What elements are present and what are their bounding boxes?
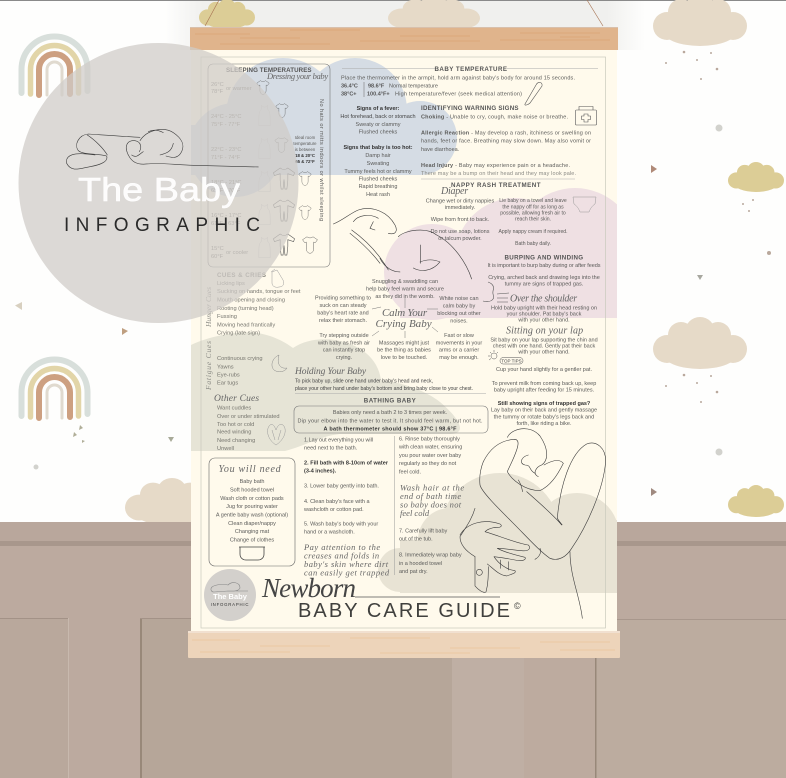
calm tips: help baby feel warm and secure bbox=[366, 286, 444, 292]
burping intro bbox=[488, 263, 601, 288]
holding text: place your other hand under baby's bottom and bring baby close to your chest. bbox=[295, 386, 473, 392]
script heading: sitting on your lap: Sitting on your lap bbox=[506, 326, 584, 336]
heading: baby temperature: BABY TEMPERATURE bbox=[435, 66, 507, 73]
hunger cues list bbox=[217, 281, 301, 336]
temperature labels: 60°F bbox=[211, 254, 224, 260]
temperature labels: 78°F bbox=[211, 89, 224, 95]
steps column one: 3. Lower baby gently into bath. bbox=[304, 484, 379, 490]
other cues list bbox=[217, 406, 280, 452]
calm tips: be the thing as babies bbox=[377, 348, 431, 354]
calm tips bbox=[315, 279, 482, 361]
small logo badge: INFOGRAPHIC bbox=[211, 602, 249, 607]
signs baby too hot: Tummy feels hot or clammy bbox=[344, 169, 412, 175]
temperature labels: 61°F - 63°F bbox=[211, 221, 241, 227]
steps column two: 6. Rinse baby thoroughly bbox=[399, 436, 460, 442]
signs baby too hot: Heat rash bbox=[366, 192, 390, 198]
fatigue cues list: Yawns bbox=[217, 364, 234, 370]
tips text: To prevent milk from coming back up, keep bbox=[492, 381, 596, 387]
ideal room temperature note: temperature bbox=[293, 141, 317, 146]
steps column two: 7. Carefully lift baby bbox=[399, 528, 448, 534]
fatigue cues list: Continuous crying bbox=[217, 356, 263, 362]
panel: identifying warning signs bbox=[421, 105, 596, 179]
other cues list: Unwell bbox=[217, 446, 234, 452]
signs baby too hot: Signs that baby is too hot: bbox=[343, 145, 413, 151]
over the shoulder text: with your other hand. bbox=[517, 318, 570, 324]
wallpaper rainbow bottom bbox=[22, 360, 88, 418]
nappy right column: Lie baby on a towel and leave bbox=[499, 198, 567, 204]
top wooden rail bbox=[190, 27, 618, 50]
calm tips: blocking out other bbox=[437, 311, 481, 317]
script note: wash hair: feel cold bbox=[400, 508, 430, 518]
sitting text bbox=[490, 338, 598, 356]
warning text: Allergic Reaction - May develop a rash, itchiness or swelling on bbox=[421, 130, 591, 136]
hunger cues list: Rooting (turning head) bbox=[217, 306, 274, 312]
steps column one: washcloth or cotton pad. bbox=[303, 507, 364, 513]
panel: baby temperature bbox=[340, 66, 598, 198]
temperature labels: 71°F - 74°F bbox=[211, 155, 241, 161]
small logo badge: The Baby bbox=[213, 592, 248, 601]
calm tips: baby's heart rate and bbox=[317, 310, 369, 316]
heading: cues and cries: CUES & CRIES bbox=[217, 272, 266, 279]
calm tips: may be enough. bbox=[439, 355, 479, 361]
steps column one: 5. Wash baby's body with your bbox=[304, 522, 378, 528]
script note: creases: Pay attention to the bbox=[303, 542, 381, 552]
script heading: holding your baby: Holding Your Baby bbox=[294, 367, 367, 377]
script note: creases: can easily get trapped bbox=[304, 568, 390, 578]
script note: wash hair: end of bath time bbox=[400, 491, 462, 501]
illustration: parent holding baby line art bbox=[460, 429, 606, 618]
bath temperature box bbox=[294, 406, 488, 433]
over the shoulder text bbox=[491, 306, 597, 324]
temperature labels: 22°C - 23°C bbox=[211, 147, 241, 153]
icon: footprints bbox=[268, 424, 285, 445]
fatigue cues list bbox=[217, 356, 263, 386]
supply list: Soft hooded towel bbox=[230, 488, 274, 494]
temperature labels: 15°C bbox=[211, 246, 224, 252]
over the shoulder text: your shoulder. Pat baby's back bbox=[507, 312, 582, 318]
trapped gas advice bbox=[491, 401, 597, 427]
temperature readings bbox=[341, 82, 522, 98]
supply list: Jug for pouring water bbox=[226, 504, 278, 510]
temperature readings: 38°C+ bbox=[341, 92, 357, 98]
warning text bbox=[421, 114, 591, 179]
script heading: other cues: Other Cues bbox=[214, 394, 260, 404]
steps column two: and pat dry. bbox=[399, 569, 428, 575]
fatigue cues list: Eye-rubs bbox=[217, 372, 240, 378]
panel: bathing baby bbox=[294, 394, 488, 578]
steps column one bbox=[303, 438, 389, 536]
signs of fever: Hot forehead, back or stomach bbox=[340, 114, 416, 120]
wallpaper stars and triangles bbox=[15, 51, 771, 496]
steps column two: out of the tub. bbox=[399, 536, 433, 542]
small logo badge bbox=[204, 569, 256, 621]
logo text: the baby: The Baby bbox=[78, 171, 241, 208]
temperature labels bbox=[211, 82, 252, 260]
icon: top tips sun and pill: TOP TIPS bbox=[501, 358, 522, 364]
temperature labels: 24°C - 25°C bbox=[211, 114, 241, 120]
script word: newborn: Newborn bbox=[261, 573, 356, 603]
icon: bottle bbox=[271, 269, 284, 287]
signs of fever bbox=[340, 106, 416, 136]
calm tips: movements in your bbox=[436, 340, 482, 346]
holding text bbox=[295, 378, 473, 392]
logo overlay: the baby infographic bbox=[18, 43, 298, 323]
ideal room temperature note: 65 & 72°F bbox=[295, 159, 315, 164]
hunger cues list: Moving head frantically bbox=[217, 322, 275, 328]
trapped gas advice: forth, like riding a bike. bbox=[516, 421, 572, 427]
bath temperature box: Dip your elbow into the water to test it. It should feel warm, but not hot. bbox=[298, 418, 483, 424]
warning text: Choking - Unable to cry, cough, make noise or breathe. bbox=[421, 114, 568, 120]
bottom wooden rail bbox=[188, 631, 620, 658]
temperature readings: High temperature/fever (seek medical attention) bbox=[395, 92, 522, 98]
nappy right column: Apply nappy cream if required. bbox=[498, 229, 568, 235]
title: newborn baby care guide bbox=[261, 573, 521, 622]
temperature readings: 36.4°C bbox=[341, 84, 358, 90]
steps column two: with clean water, ensuring bbox=[398, 444, 462, 450]
bath temperature box: A bath thermometer should show 37°C | 98.6°F bbox=[324, 426, 457, 432]
nappy right column: the nappy off for as long as bbox=[502, 204, 564, 210]
panel: burping and winding bbox=[483, 254, 601, 427]
over the shoulder text: Hold baby upright with their head resting on bbox=[491, 306, 597, 312]
poster inner border bbox=[201, 57, 606, 628]
calm tips: with baby as fresh air bbox=[317, 340, 370, 346]
bath temperature box: Babies only need a bath 2 to 3 times per week. bbox=[333, 410, 448, 416]
supply list: Clean diaper/nappy bbox=[228, 521, 276, 527]
panel: you will need bbox=[209, 458, 295, 566]
temperature labels: 18°C - 21°C bbox=[211, 180, 241, 186]
steps column two: feel cold. bbox=[399, 470, 421, 476]
ideal room temperature note: Ideal room bbox=[295, 135, 316, 140]
script note: wash hair: so baby does not bbox=[400, 500, 462, 510]
supply list: Changing mat bbox=[235, 529, 270, 535]
ideal room temperature note: 18 & 20°C bbox=[295, 153, 315, 158]
steps column two bbox=[398, 436, 462, 575]
illustration: swaddling parent and baby bbox=[333, 209, 472, 279]
temperature readings: 100.4°F+ bbox=[367, 92, 390, 98]
blue cloud blob bbox=[188, 58, 457, 197]
vertical note: No hats or mitts indoors or whilst sleeping bbox=[318, 99, 324, 221]
wallpaper background bbox=[0, 0, 786, 522]
vertical label: hunger cues: Hunger Cues bbox=[204, 286, 213, 328]
logo text: infographic: INFOGRAPHIC bbox=[64, 215, 260, 236]
calm tips: Fast or slow bbox=[444, 333, 474, 339]
logo baby line drawing bbox=[66, 129, 258, 169]
steps column two: in a hooded towel bbox=[399, 561, 442, 567]
nappy left column: Wipe from front to back. bbox=[431, 217, 490, 223]
script note: wash hair bbox=[400, 482, 465, 518]
burping intro: tummy are signs of trapped gas. bbox=[505, 282, 584, 288]
other cues list: Need changing bbox=[217, 438, 255, 444]
signs baby too hot: Damp hair bbox=[365, 153, 391, 159]
icon: bathtub bbox=[239, 547, 265, 560]
icon: thermometer bbox=[525, 82, 542, 105]
hanging string bbox=[205, 0, 603, 26]
vertical label: fatigue cues: Fatigue Cues bbox=[204, 340, 213, 391]
warning text: Head Injury - Baby may experience pain or a headache. bbox=[421, 163, 570, 169]
signs of fever: Sweaty or clammy bbox=[356, 122, 401, 128]
steps column one: need next to the bath. bbox=[304, 446, 358, 452]
nappy left column: immediately. bbox=[445, 205, 476, 211]
hunger cues list: Licking lips bbox=[217, 281, 245, 287]
hunger cues list: Mouth opening and closing bbox=[217, 298, 285, 304]
nappy left column bbox=[426, 198, 494, 242]
other cues list: Over or under stimulated bbox=[217, 414, 280, 420]
hunger cues list: Crying (late sign) bbox=[217, 330, 260, 336]
warning text: hands, feet or face. Breathing may slow down. May also vomit or bbox=[421, 138, 591, 144]
nappy right column bbox=[498, 198, 568, 247]
steps column one: hand or a washcloth. bbox=[304, 530, 355, 536]
icons: baby clothing bbox=[257, 81, 318, 255]
panel: nappy rash treatment bbox=[426, 182, 596, 247]
temperature readings: Normal temperature bbox=[389, 84, 438, 90]
heading: bathing baby: BATHING BABY bbox=[364, 398, 417, 404]
icon: bracket arrows bbox=[483, 282, 509, 302]
temperature labels: 16°C - 17°C bbox=[211, 213, 241, 219]
nappy right column: reach their skin. bbox=[515, 216, 551, 222]
calm tips: crying. bbox=[336, 355, 353, 361]
heading: dressing your baby: Dressing your baby bbox=[266, 71, 329, 81]
calm tips: relax their stomach. bbox=[319, 318, 367, 324]
warning text: There may be a bump on their head and they may look pale. bbox=[421, 171, 576, 177]
poster bbox=[188, 48, 637, 632]
icon: nappy bbox=[573, 197, 596, 212]
panel: sleeping temperatures bbox=[208, 64, 330, 267]
panel: holding your baby bbox=[294, 367, 473, 392]
trapped gas advice: Lay baby on their back and gently massage bbox=[491, 408, 597, 414]
calm tips: can instantly stop bbox=[323, 348, 365, 354]
nappy left column: Do not use soap, lotions bbox=[430, 229, 490, 235]
trapped gas advice: Still showing signs of trapped gas? bbox=[498, 401, 591, 407]
overlay circle bbox=[18, 43, 298, 323]
calm tips: as they did in the womb. bbox=[375, 294, 435, 300]
signs baby too hot bbox=[343, 145, 413, 198]
steps column one: 1.Lay out everything you will bbox=[304, 438, 373, 444]
steps column two: you pour water over baby bbox=[399, 453, 461, 459]
temperature labels: 26°C bbox=[211, 82, 224, 88]
script heading: diaper: Diaper bbox=[440, 186, 469, 197]
heading: nappy rash: NAPPY RASH TREATMENT bbox=[451, 182, 541, 189]
supply list: A gentle baby wash (optional) bbox=[216, 512, 288, 518]
warning text: have diarrhoea. bbox=[421, 147, 460, 153]
script heading: calm your crying baby: Crying Baby bbox=[376, 318, 432, 330]
calm tips: arms or a carrier bbox=[439, 348, 479, 354]
nappy right column: Bath baby daily. bbox=[515, 241, 551, 247]
heading: sleeping temperatures: SLEEPING TEMPERATURES bbox=[226, 67, 312, 74]
signs baby too hot: Rapid breathing bbox=[359, 184, 397, 190]
copyright mark: © bbox=[514, 601, 521, 611]
calm tips: Snuggling & swaddling can bbox=[372, 279, 438, 285]
calm tips: calm baby by bbox=[443, 304, 475, 310]
burping intro: It is important to burp baby during or after feeds bbox=[488, 263, 601, 269]
nappy left column: or talcum powder. bbox=[438, 236, 482, 242]
ideal room temperature note bbox=[293, 135, 317, 164]
temperature labels: or cooler bbox=[226, 250, 248, 256]
calm tips: Massages might just bbox=[379, 340, 430, 346]
icon: moon bbox=[272, 355, 287, 372]
supply list bbox=[216, 479, 288, 544]
supply list: Change of clothes bbox=[230, 538, 274, 544]
icon: first aid kit bbox=[576, 106, 596, 125]
icon: top tips sun and pill bbox=[488, 350, 523, 364]
beige cloud blob bbox=[378, 473, 619, 593]
hunger cues list: Sucking on hands, tongue or feet bbox=[217, 289, 301, 295]
script heading: calm your crying baby bbox=[376, 307, 432, 330]
calm tips: Try stepping outside bbox=[319, 333, 369, 339]
steps column two: 8. Immediately wrap baby bbox=[399, 552, 462, 558]
calm tips: noises. bbox=[450, 318, 468, 324]
supply list: Wash cloth or cotton pads bbox=[220, 496, 284, 502]
wainscot wall panelling bbox=[0, 522, 786, 778]
tips text bbox=[492, 367, 596, 394]
steps column two: regularly so they do not bbox=[399, 461, 457, 467]
main title: BABY CARE GUIDE bbox=[298, 600, 510, 622]
panel: cues and cries bbox=[204, 269, 301, 452]
script note: wash hair: Wash hair at the bbox=[400, 482, 465, 492]
other cues list: Need winding bbox=[217, 430, 251, 436]
trapped gas advice: the tummy or rotate baby's legs back and bbox=[494, 414, 594, 420]
other cues list: Want cuddles bbox=[217, 406, 251, 412]
temperature labels: 75°F - 77°F bbox=[211, 122, 241, 128]
signs of fever: Signs of a fever: bbox=[357, 106, 400, 112]
heading: burping: BURPING AND WINDING bbox=[504, 254, 584, 262]
hunger cues list: Fussing bbox=[217, 314, 237, 320]
script note: creases: creases and folds in bbox=[304, 550, 380, 560]
script heading: you will need: You will need bbox=[218, 464, 282, 475]
calm tips: suck on can steady bbox=[319, 303, 367, 309]
temperature labels: or warmer bbox=[226, 86, 252, 92]
signs of fever: Flushed cheeks bbox=[359, 130, 398, 136]
poster paper bbox=[191, 48, 617, 632]
script heading: calm your crying baby: Calm Your bbox=[382, 307, 428, 319]
tips text: Cup your hand slightly for a gentler pat. bbox=[496, 367, 592, 373]
instructions: Place the thermometer in the armpit, hold arm against baby's body for around 15 seconds. bbox=[341, 76, 575, 82]
heading: warning signs: IDENTIFYING WARNING SIGNS bbox=[421, 105, 519, 112]
signs baby too hot: Flushed cheeks bbox=[359, 176, 398, 182]
script heading: over the shoulder: Over the shoulder bbox=[510, 294, 578, 304]
icons: sleep sacks bbox=[259, 105, 270, 258]
tips text: baby upright after feeding for 15 minutes. bbox=[494, 388, 595, 394]
pointer arrows bbox=[372, 298, 438, 338]
sage cloud blob bbox=[191, 332, 460, 451]
ideal room temperature note: is between bbox=[295, 147, 316, 152]
nappy right column: possible, allowing fresh air to bbox=[500, 210, 566, 216]
fatigue cues list: Ear tugs bbox=[217, 380, 238, 386]
holding text: To pick baby up, slide one hand under baby's head and neck, bbox=[295, 378, 433, 384]
calm tips: Providing something to bbox=[315, 296, 371, 302]
calm tips: White noise can bbox=[439, 296, 479, 302]
temperature readings: 98.6°F bbox=[368, 84, 385, 90]
wallpaper clouds bbox=[125, 0, 784, 526]
sitting text: chest with one hand. Gently pat their back bbox=[493, 344, 595, 350]
pink cloud blob bbox=[384, 188, 637, 320]
steps column one: (3-4 inches). bbox=[304, 468, 337, 474]
steps column one: 2. Fill bath with 8-10cm of water bbox=[304, 460, 389, 466]
script note: creases: baby's skin where dirt bbox=[304, 559, 389, 569]
wallpaper rainbow top bbox=[22, 36, 88, 95]
temperature labels: 65°F - 70°F bbox=[211, 188, 241, 194]
supply list: Baby bath bbox=[240, 479, 264, 485]
nappy left column: Change wet or dirty nappies bbox=[426, 198, 494, 204]
script note: creases bbox=[303, 542, 390, 578]
steps column one: 4. Clean baby's face with a bbox=[304, 499, 371, 505]
sitting text: with your other hand. bbox=[517, 350, 570, 356]
burping intro: Crying, arched back and drawing legs into the bbox=[488, 275, 600, 281]
panel: calm your crying baby bbox=[315, 279, 482, 361]
calm tips: love to be touched. bbox=[381, 355, 428, 361]
signs baby too hot: Sweating bbox=[367, 161, 389, 167]
other cues list: Too hot or cold bbox=[217, 422, 254, 428]
sitting text: Sit baby on your lap supporting the chin and bbox=[490, 338, 598, 344]
